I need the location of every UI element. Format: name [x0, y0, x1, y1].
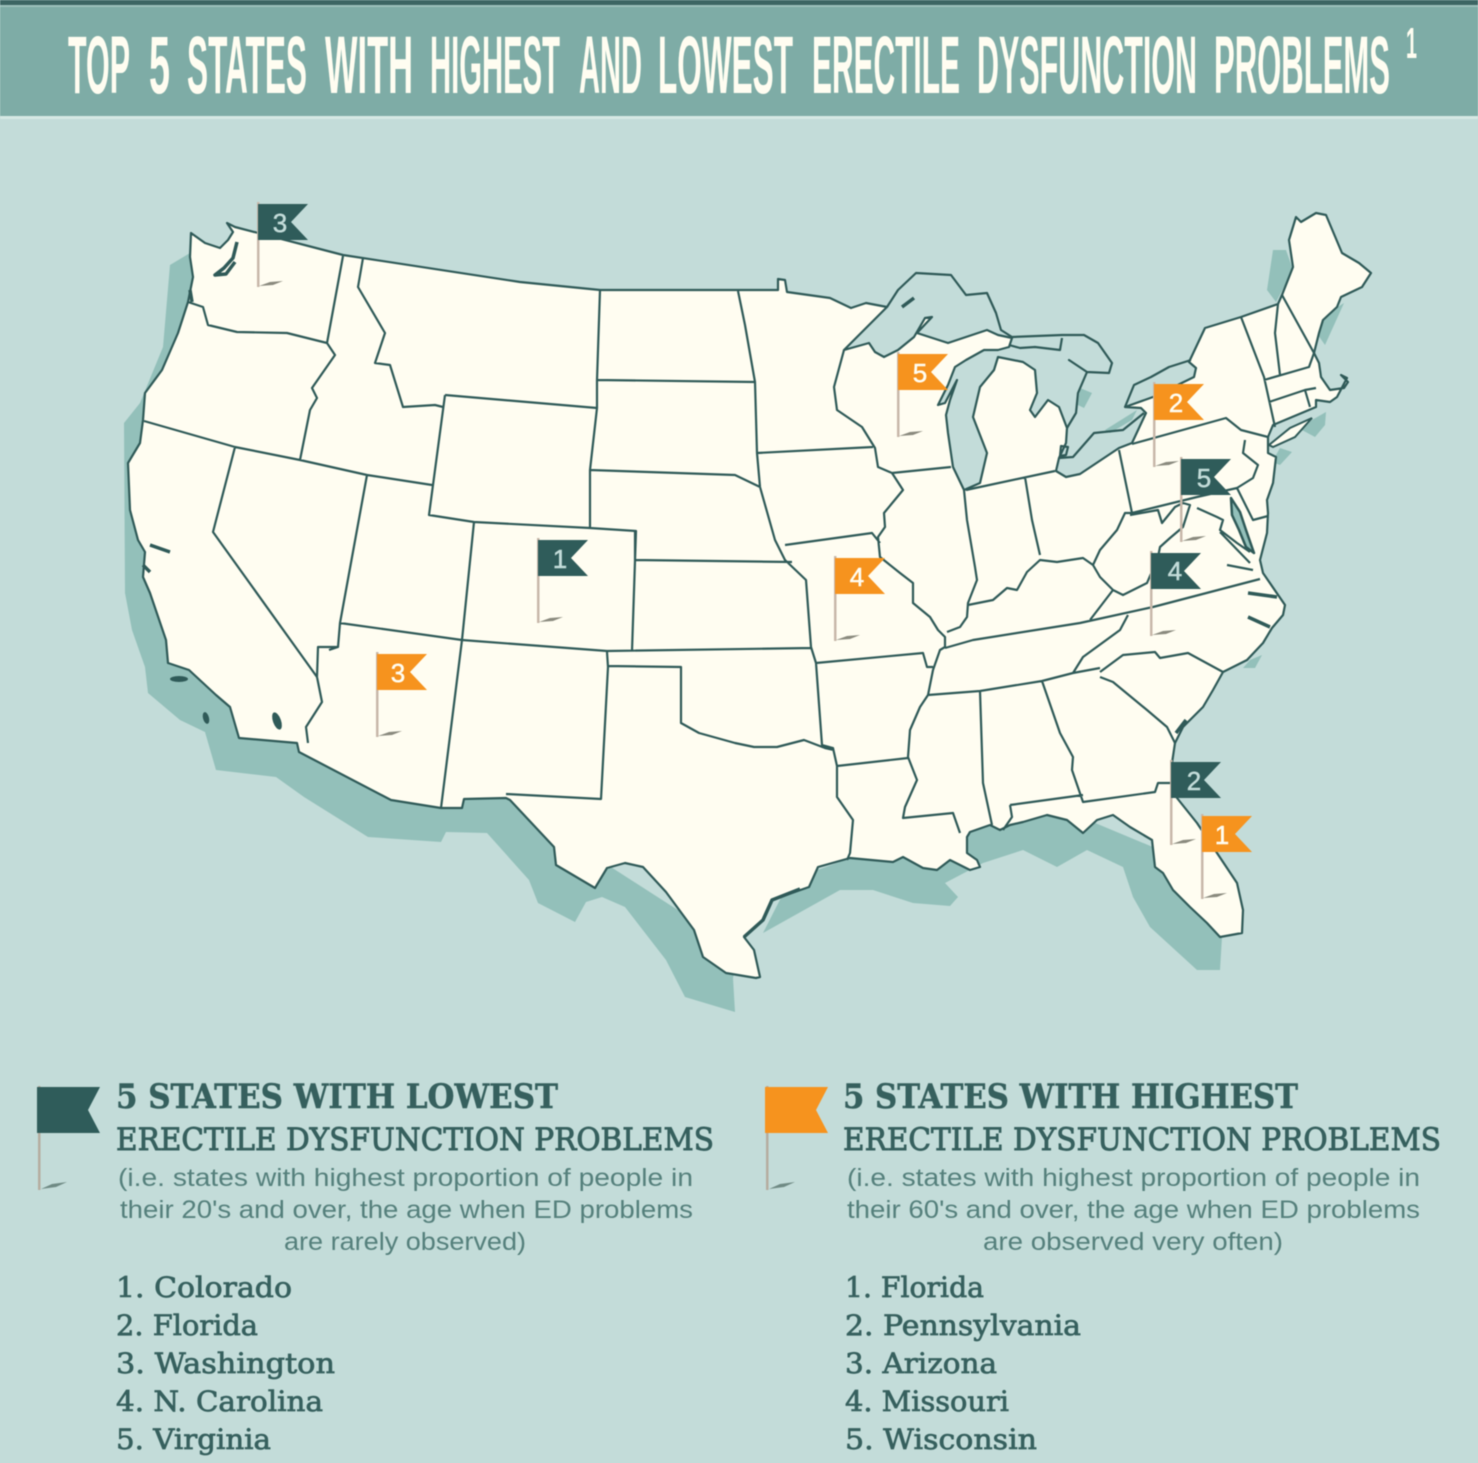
- title: AND: [579, 20, 642, 111]
- title: 5: [149, 20, 170, 111]
- title: HIGHEST: [430, 20, 560, 111]
- list: highest states: 2. Pennsylvania: [845, 1309, 1081, 1342]
- icon: dark flag: [37, 1086, 100, 1190]
- land: [128, 213, 1371, 978]
- flag: lowest 2 Florida: [1170, 760, 1221, 845]
- flag: highest 4 Missouri: [834, 556, 885, 641]
- description: highest: (i.e. states with highest proportion of people in: [847, 1164, 1420, 1192]
- description: highest: [847, 1164, 1420, 1256]
- list: lowest states: [116, 1271, 335, 1456]
- Long Island: [1269, 418, 1312, 447]
- heading: lowest: 5 STATES WITH LOWEST: [116, 1077, 558, 1117]
- flag: lowest 4 North Carolina: 4: [1168, 556, 1182, 586]
- title: [68, 19, 1417, 111]
- subheading: highest: ERECTILE DYSFUNCTION PROBLEMS: [843, 1122, 1441, 1158]
- flag: lowest 3 Washington: 3: [273, 208, 287, 238]
- coastal shadow: west and south-west: [124, 250, 740, 1012]
- list: lowest states: 4. N. Carolina: [116, 1385, 323, 1418]
- Chesapeake Bay: [1231, 498, 1254, 553]
- description: lowest: their 20's and over, the age when ED problems: [120, 1196, 693, 1224]
- flag: highest 2 Pennsylvania: [1153, 382, 1204, 467]
- icon: orange flag: [765, 1086, 828, 1190]
- list: highest states: [845, 1271, 1081, 1456]
- coastal shadow: north-east details: [1078, 250, 1344, 668]
- list: lowest states: 2. Florida: [116, 1309, 258, 1342]
- description: highest: their 60's and over, the age when ED problems: [847, 1196, 1420, 1224]
- flag: highest 1 Florida: 1: [1215, 820, 1229, 850]
- title: WITH: [325, 20, 413, 111]
- list: highest states: 3. Arizona: [845, 1347, 997, 1380]
- panel: highest states legend: [765, 1077, 1441, 1456]
- panel: lowest states legend: [37, 1077, 714, 1456]
- flag: highest 4 Missouri: 4: [850, 562, 864, 592]
- flag: lowest 2 Florida: 2: [1187, 766, 1201, 796]
- list: lowest states: 3. Washington: [116, 1347, 335, 1380]
- list: highest states: 1. Florida: [845, 1271, 984, 1304]
- title: TOP: [68, 20, 130, 111]
- description: highest: are observed very often): [983, 1228, 1283, 1256]
- list: highest states: 4. Missouri: [845, 1385, 1009, 1418]
- description: lowest: (i.e. states with highest proportion of people in: [118, 1164, 693, 1192]
- flag: highest 3 Arizona: [376, 652, 427, 737]
- flag: highest 1 Florida: [1201, 814, 1252, 899]
- header band: [0, 0, 1478, 119]
- list: highest states: 5. Wisconsin: [845, 1423, 1037, 1456]
- title: STATES: [187, 20, 307, 111]
- flag: lowest 1 Colorado: 1: [553, 544, 567, 574]
- flag: lowest 4 North Carolina: [1150, 551, 1201, 636]
- title: LOWEST: [658, 20, 793, 111]
- flag: highest 5 Wisconsin: 5: [913, 358, 927, 388]
- list: lowest states: 1. Colorado: [116, 1271, 292, 1304]
- flag: highest 2 Pennsylvania: 2: [1169, 388, 1183, 418]
- Great Lakes and Canadian shorelines: [887, 273, 1191, 458]
- flag: lowest 3 Washington: [257, 202, 308, 287]
- list: lowest states: 5. Virginia: [116, 1423, 271, 1456]
- text: 1: [1406, 19, 1417, 68]
- subheading: lowest: ERECTILE DYSFUNCTION PROBLEMS: [116, 1122, 714, 1158]
- heading: highest: 5 STATES WITH HIGHEST: [843, 1077, 1298, 1117]
- flag: highest 5 Wisconsin: [897, 352, 948, 437]
- title: ERECTILE: [812, 20, 960, 111]
- coastal shadow: gulf and Florida: [763, 800, 1222, 970]
- islands and Salton Sea: [170, 676, 284, 731]
- description: lowest: are rarely observed): [284, 1228, 526, 1256]
- state borders: [144, 256, 1316, 860]
- flag: highest 3 Arizona: 3: [391, 658, 405, 688]
- Puget Sound and coast details: [143, 242, 1277, 937]
- flag: lowest 1 Colorado: [537, 538, 588, 623]
- flag: lowest 5 Virginia: 5: [1197, 463, 1211, 493]
- map of the United States: [124, 213, 1371, 1012]
- flag: lowest 5 Virginia: [1180, 457, 1231, 542]
- description: lowest: [118, 1164, 693, 1256]
